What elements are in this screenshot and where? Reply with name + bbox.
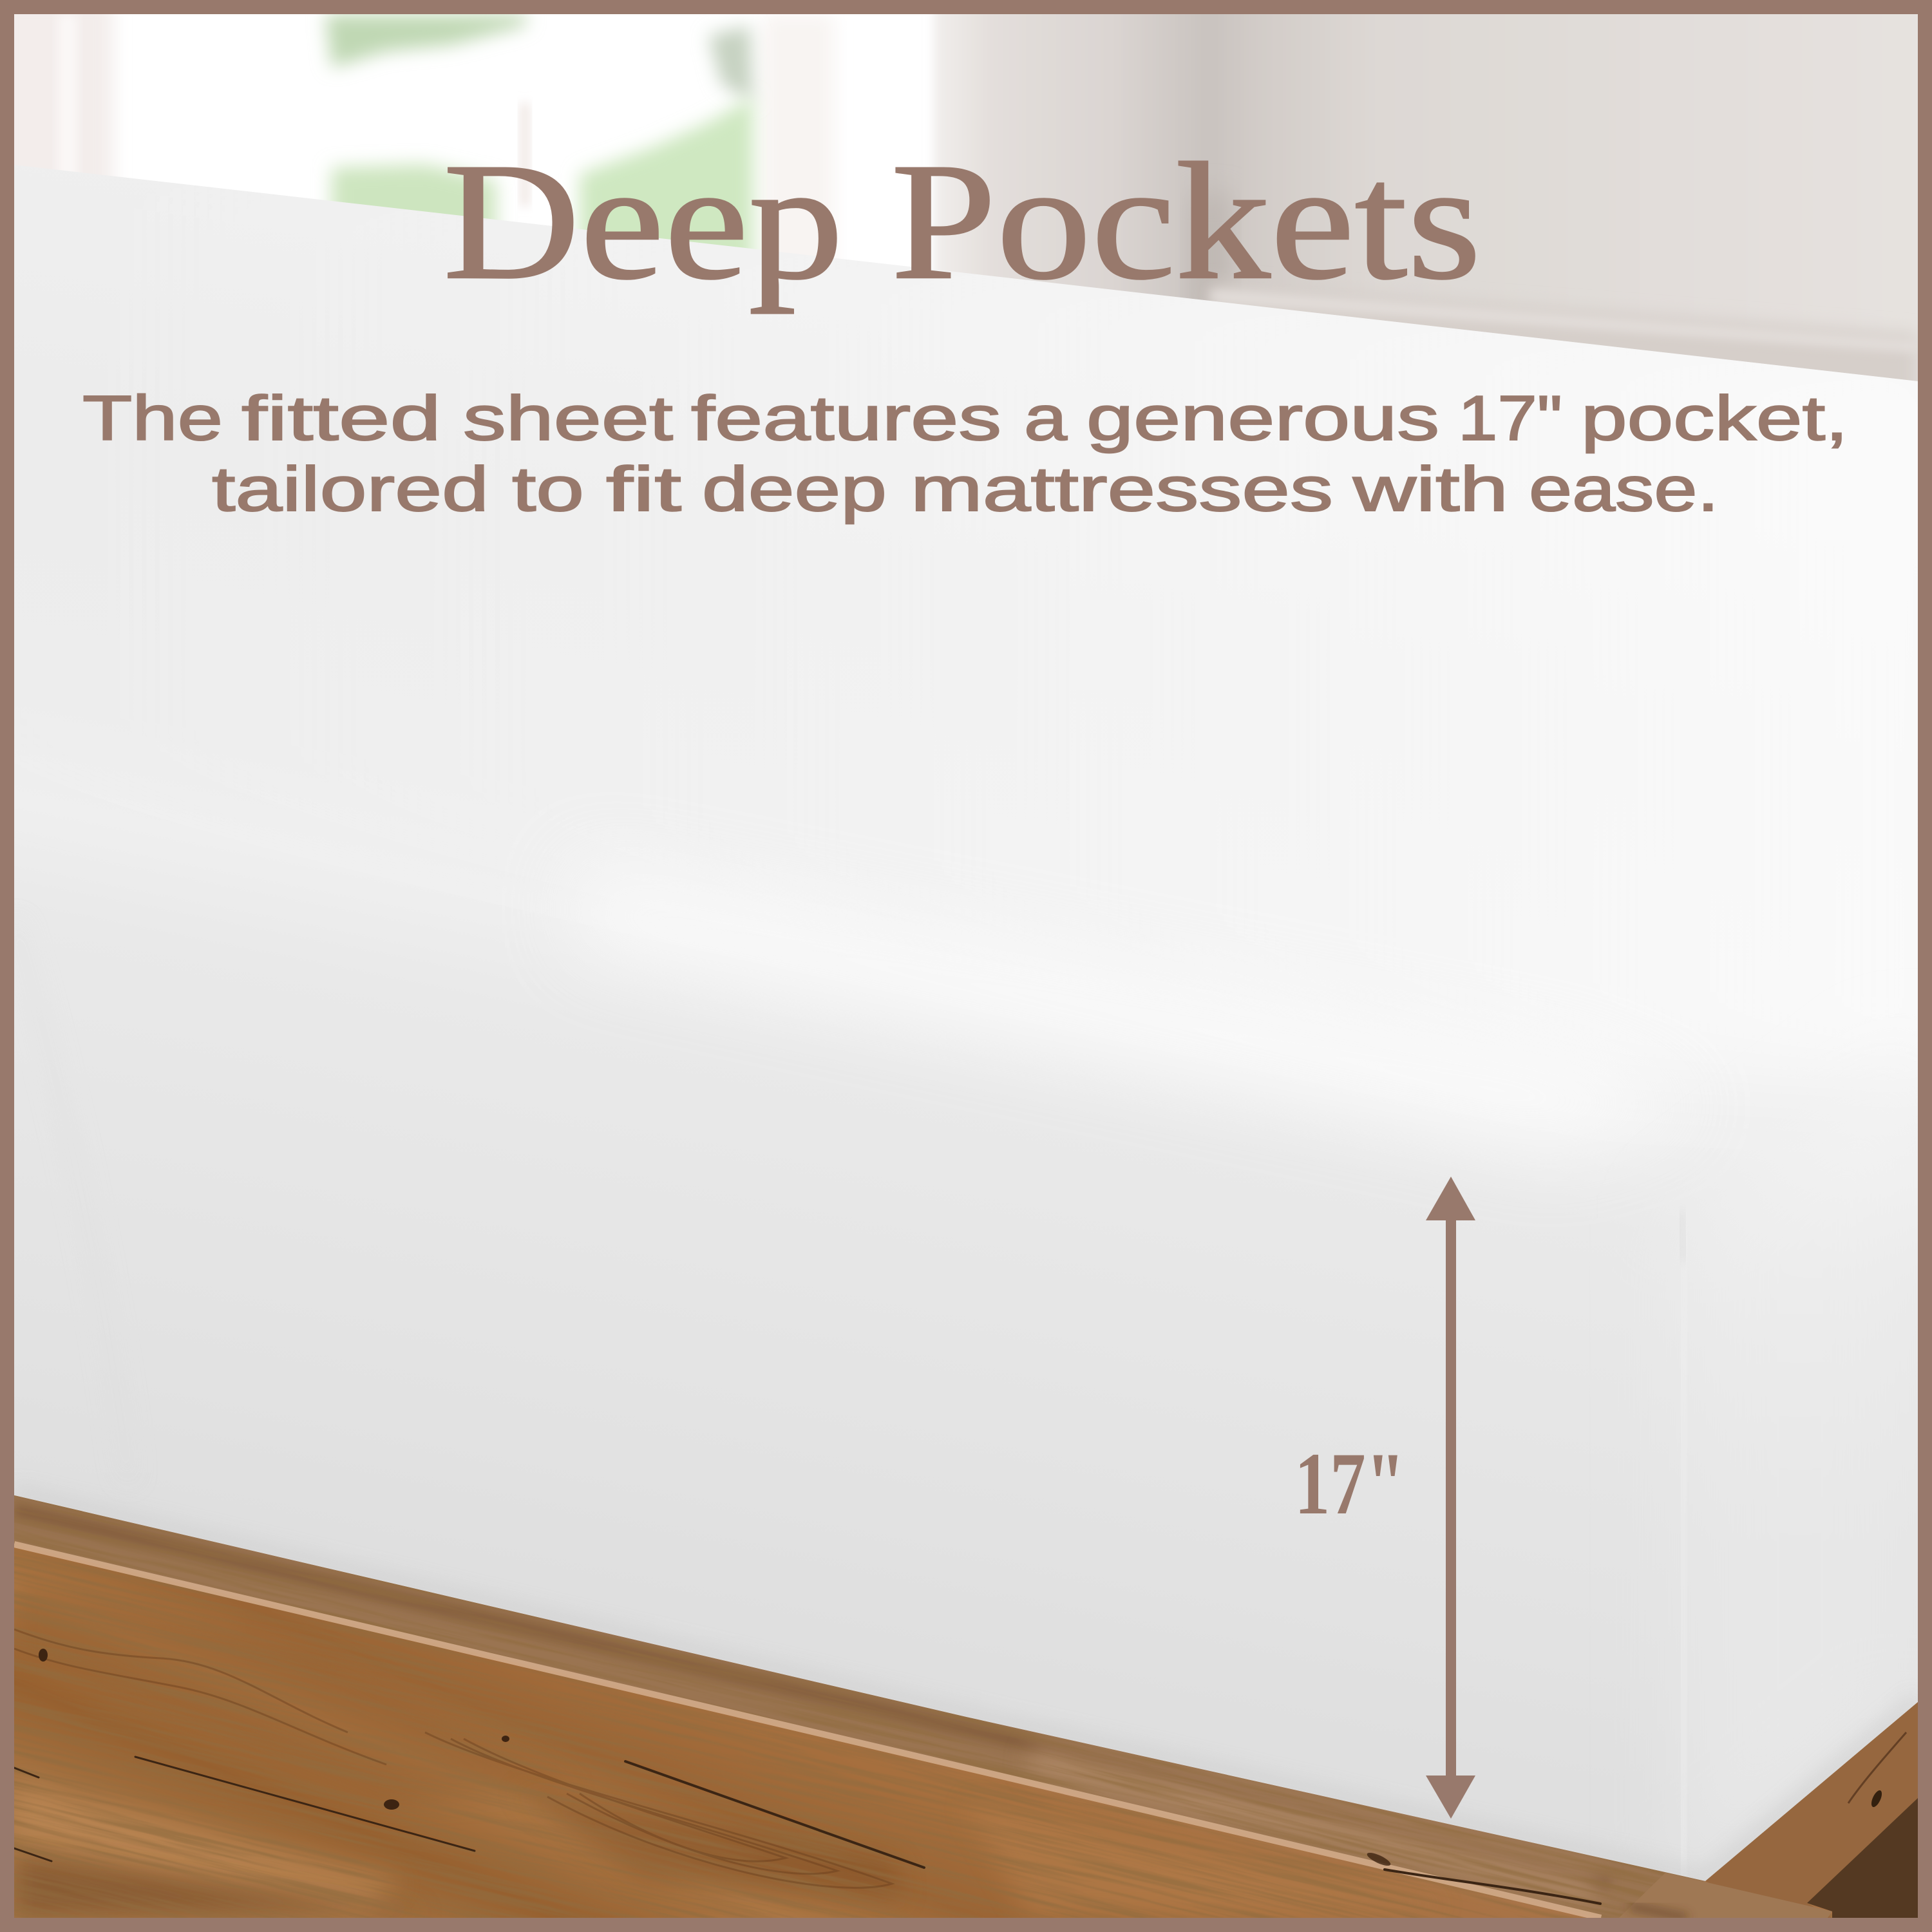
description text: generous	[1086, 383, 1439, 453]
wood top rail	[14, 1495, 1705, 1918]
description text: The	[82, 383, 223, 453]
description text: deep	[702, 453, 887, 524]
title: Deep Pockets	[443, 129, 1481, 314]
description text: 17"	[1458, 383, 1562, 453]
description text: to	[512, 453, 584, 524]
wood cracks and knots	[14, 1757, 1600, 1904]
description text: pocket,	[1581, 383, 1848, 453]
sheet top surface light	[1153, 298, 1918, 1074]
wood light edge	[14, 1544, 1601, 1918]
wood cathedral grain	[14, 1629, 892, 1888]
wooden bed frame	[14, 1481, 1918, 1918]
sheet corner panel	[1775, 1810, 1790, 1823]
right bed rail	[1705, 1702, 1918, 1918]
description text: with	[1352, 453, 1508, 524]
wood grain texture	[14, 1495, 1918, 1918]
description text: a	[1024, 383, 1068, 453]
sheet highlight along mattress edge	[1193, 1028, 1538, 1106]
description text: features	[691, 383, 1001, 453]
description text: fit	[606, 453, 681, 524]
description text: sheet	[463, 383, 673, 453]
wood bands	[14, 1578, 580, 1803]
sheet shadow above bed frame	[14, 1493, 1918, 1879]
dark inner frame	[1807, 1798, 1918, 1918]
description text	[82, 383, 1848, 524]
corner strip	[1619, 1873, 1832, 1918]
measurement label: 17"	[1294, 1434, 1405, 1533]
description text: ease.	[1529, 453, 1719, 524]
background: blurred window and wall	[14, 14, 1918, 381]
description text: tailored	[212, 453, 489, 524]
description text: fitted	[242, 383, 441, 453]
double-headed measurement arrow	[1426, 1177, 1475, 1819]
description text: mattresses	[911, 453, 1333, 524]
sheet seam and crease	[1682, 1214, 1686, 1884]
